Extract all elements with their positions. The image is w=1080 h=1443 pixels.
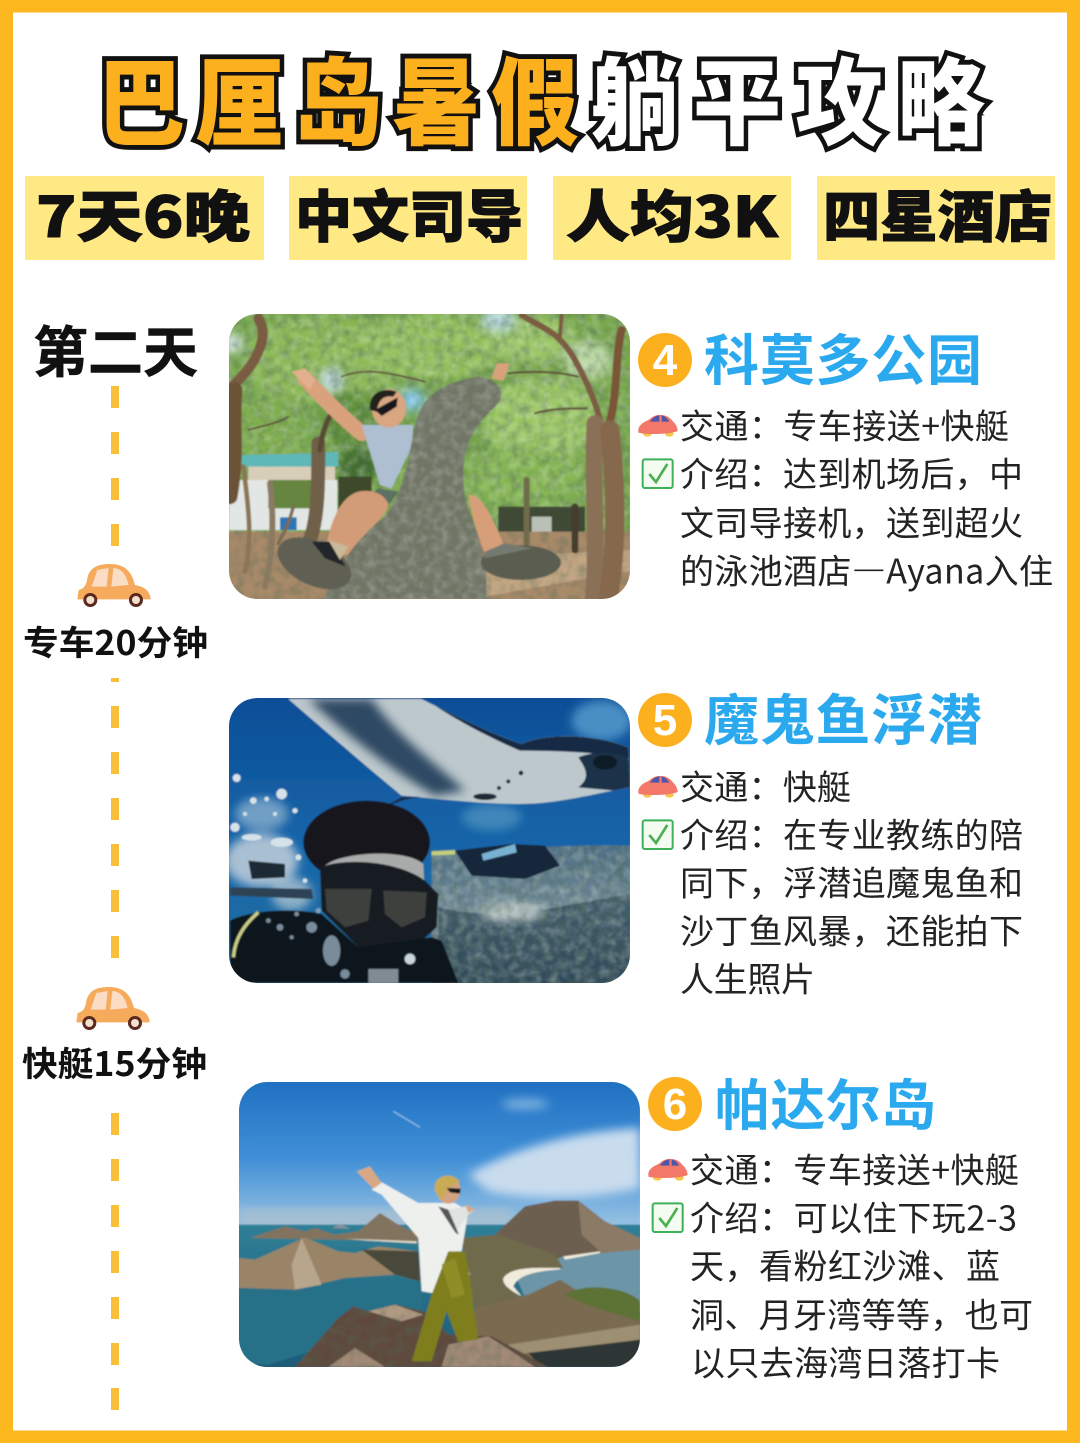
body text: 交通：专车接送+快艇 (690, 1144, 1019, 1192)
body text: 洞、月牙湾等等，也可 (690, 1288, 1033, 1338)
tags row (25, 173, 1055, 260)
heading: 科莫多公园 (704, 316, 982, 396)
clouds (468, 1099, 640, 1197)
body text: 天，看粉红沙滩、蓝 (690, 1240, 1000, 1288)
day heading: 第二天 (33, 308, 198, 388)
foliage (225, 310, 632, 507)
icon: red car (648, 1159, 688, 1181)
label: 快艇15分钟: 快艇15分钟 (22, 1037, 207, 1086)
bubbles (225, 797, 312, 911)
dashed timeline (111, 386, 119, 1410)
body text: 的泳池酒店—Ayana入住 (680, 544, 1053, 594)
building (242, 452, 338, 467)
body text: 以只去海湾日落打卡 (691, 1336, 1000, 1386)
number badge 4: 4 (653, 336, 678, 385)
icon: red car (638, 776, 678, 798)
big mountain (494, 1200, 602, 1270)
body text: 交通：快艇 (680, 760, 851, 810)
body text: 同下，浮潜追魔鬼鱼和 (680, 856, 1023, 906)
section 6: 帕达尔岛 (648, 1061, 1033, 1386)
tag: 人均3K: 人均3K (566, 173, 780, 254)
body text: 介绍：达到机场后，中 (680, 448, 1023, 496)
far islands (250, 1213, 418, 1241)
diver face (302, 800, 431, 871)
manta (285, 697, 632, 807)
trunks (230, 315, 622, 598)
section 4: 科莫多公园 (638, 316, 1053, 594)
number badge 6 (648, 1077, 702, 1131)
icon: red car (638, 415, 678, 437)
section 5: 魔鬼鱼浮潜 (638, 676, 1023, 1002)
diver body (230, 911, 458, 983)
title (97, 28, 985, 165)
number badge 5 (638, 693, 692, 747)
number badge 5: 5 (653, 696, 677, 745)
body text: 沙丁鱼风暴，还能拍下 (680, 904, 1023, 954)
heading: 帕达尔岛 (715, 1061, 936, 1141)
body text: 文司导接机，送到超火 (680, 496, 1023, 546)
body text: 介绍：在专业教练的陪 (680, 808, 1023, 858)
near left island (239, 1237, 420, 1290)
tag: 7天6晚: 7天6晚 (36, 173, 250, 254)
label: 专车20分钟: 专车20分钟 (23, 616, 208, 665)
photo: Padar island viewpoint (235, 1078, 645, 1371)
body text (690, 1144, 1033, 1386)
man (305, 378, 362, 433)
ground (225, 532, 635, 603)
icon: green checkbox (653, 1203, 683, 1232)
icon: green checkbox (643, 820, 673, 849)
body text: 交通：专车接送+快艇 (680, 400, 1009, 448)
body text (680, 400, 1053, 594)
icon: orange car 2 (76, 987, 150, 1030)
background diver (455, 844, 560, 879)
heading: 魔鬼鱼浮潜 (704, 676, 982, 756)
tag: 中文司导: 中文司导 (295, 173, 523, 254)
icon: green checkbox (643, 459, 673, 488)
number badge 4 (638, 333, 692, 387)
title: 躺平攻略 (591, 28, 985, 165)
body text (680, 760, 1023, 1002)
tag: 四星酒店: 四星酒店 (823, 173, 1052, 254)
figure (372, 1181, 470, 1293)
water (235, 1225, 645, 1371)
shoes (277, 536, 352, 590)
statue (325, 377, 501, 599)
rock under figure (295, 1305, 548, 1367)
icon: orange car 1 (77, 564, 151, 607)
title: 巴厘岛暑假 (97, 28, 579, 165)
number badge 6: 6 (663, 1080, 687, 1129)
photo: manta ray snorkelling (225, 694, 635, 987)
body text: 介绍：可以住下玩2-3 (690, 1192, 1017, 1240)
right foreground (475, 1280, 640, 1367)
body text: 人生照片 (680, 952, 815, 1002)
seabed (432, 845, 635, 987)
photo: man on komodo statue (225, 310, 635, 603)
